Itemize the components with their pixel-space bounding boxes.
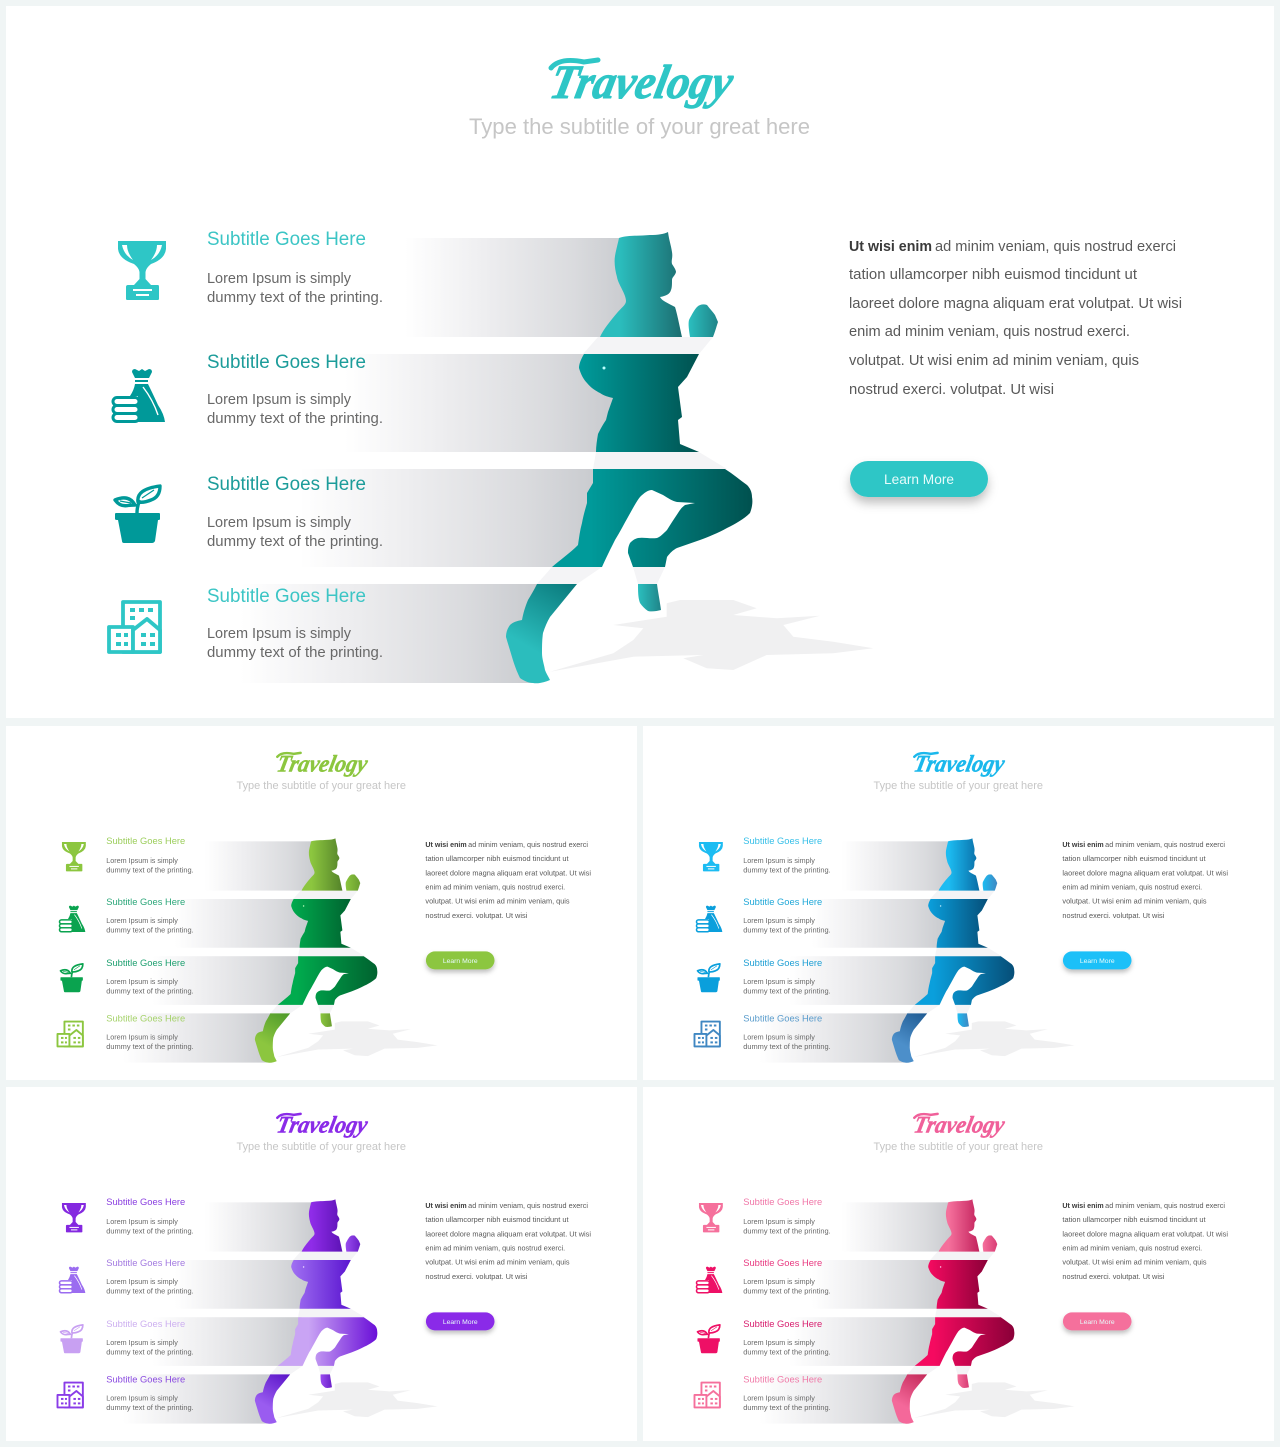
item 4 text: Subtitle Goes Here [207,586,366,607]
ground shadow [550,600,873,672]
body paragraph: enim ad minim veniam, quis nostrud exerci. [425,882,565,891]
item 1 text: Subtitle Goes Here [106,836,185,847]
panel: blue slide [643,726,1274,1080]
ground shadow [277,1021,437,1057]
item 4 text: Subtitle Goes Here [106,1014,185,1025]
title: Travelogy [546,56,738,109]
body paragraph: laoreet dolore magna aliquam erat volutpat. Ut wisi [1062,868,1228,877]
item 1 text: Subtitle Goes Here [743,836,822,847]
item 4 text: Subtitle Goes Here [743,1014,822,1025]
item 2 text: Lorem Ipsum is simply [106,916,178,925]
item 4 text [207,586,383,661]
icon: plant [697,964,720,992]
body paragraph: tation ullamcorper nibh euismod tincidunt ut [1062,1215,1207,1224]
body paragraph: Ut wisi enim [1062,840,1104,849]
item 4 text: Lorem Ipsum is simply [207,626,352,642]
icon: buildings [57,1383,83,1407]
gradient bars [760,1202,1002,1424]
title: Travelogy [274,1112,370,1139]
runner silhouette [892,838,1014,1063]
body paragraph [849,238,1182,398]
body paragraph [425,840,591,920]
panel: pink slide [643,1087,1274,1441]
subtitle: Type the subtitle of your great here [873,780,1043,792]
item 1 text: Subtitle Goes Here [743,1197,822,1208]
item 4 text: dummy text of the printing. [207,645,383,661]
item 1 text [743,836,831,874]
item 1 text: Lorem Ipsum is simply [207,271,352,287]
icon: money bag [696,906,722,932]
item 1 text: dummy text of the printing. [106,865,194,874]
item 1 text: dummy text of the printing. [207,290,383,306]
item 3 text: Subtitle Goes Here [106,958,185,969]
body paragraph: laoreet dolore magna aliquam erat volutpat. Ut wisi [849,295,1182,312]
item 1 text: Subtitle Goes Here [106,1197,185,1208]
item 3 text [743,958,831,996]
item 2 text [743,1258,831,1296]
button: learn more [1063,951,1132,969]
item 1 text: Lorem Ipsum is simply [743,1217,815,1226]
item 2 text [106,897,194,935]
item 3 text: dummy text of the printing. [743,987,831,996]
body paragraph: Ut wisi enim [849,238,932,255]
gradient bars [760,841,1002,1063]
body paragraph: volutpat. Ut wisi enim ad minim veniam, quis [1062,897,1207,906]
body paragraph: volutpat. Ut wisi enim ad minim veniam, quis [425,1258,570,1267]
item 1 text [207,229,383,306]
item 1 text [106,1197,194,1235]
item 3 text: dummy text of the printing. [743,1348,831,1357]
item 4 text [106,1375,194,1412]
item 2 text: Lorem Ipsum is simply [207,392,352,408]
button: learn more [1063,1312,1132,1330]
runner silhouette [255,838,377,1063]
item 4 text: Lorem Ipsum is simply [743,1032,815,1041]
icon: buildings [694,1383,720,1407]
button: learn more [850,461,988,497]
ground shadow [277,1382,437,1418]
item 3 text: Lorem Ipsum is simply [207,515,352,531]
body paragraph: laoreet dolore magna aliquam erat volutpat. Ut wisi [425,868,591,877]
subtitle: Type the subtitle of your great here [236,780,406,792]
body paragraph [1062,1201,1228,1281]
body paragraph: laoreet dolore magna aliquam erat volutpat. Ut wisi [425,1229,591,1238]
item 4 text: dummy text of the printing. [106,1042,194,1051]
body paragraph: tation ullamcorper nibh euismod tincidunt ut [425,1215,570,1224]
item 2 text: dummy text of the printing. [743,1287,831,1296]
icon: plant [60,1325,83,1353]
item 3 text: Subtitle Goes Here [743,958,822,969]
gradient bars [123,1202,365,1424]
item 4 text: Lorem Ipsum is simply [106,1393,178,1402]
item 4 text [106,1014,194,1051]
ground shadow [914,1021,1074,1057]
item 1 text: dummy text of the printing. [106,1226,194,1235]
subtitle: Type the subtitle of your great here [236,1141,406,1153]
icon: trophy [699,842,723,871]
item 2 text: Subtitle Goes Here [106,1258,185,1269]
subtitle: Type the subtitle of your great here [873,1141,1043,1153]
body paragraph: ad minim veniam, quis nostrud exerci [935,238,1176,255]
body paragraph: tation ullamcorper nibh euismod tincidunt ut [849,266,1138,283]
item 4 text: dummy text of the printing. [106,1403,194,1412]
item 3 text: Lorem Ipsum is simply [106,977,178,986]
icon: plant [60,964,83,992]
button: learn more: Learn More [443,1319,478,1326]
icon: money bag [59,906,85,932]
panel: green slide [6,726,637,1080]
icon: trophy [699,1203,723,1232]
body paragraph: enim ad minim veniam, quis nostrud exerci. [1062,1243,1202,1252]
body paragraph: Ut wisi enim [1062,1201,1104,1210]
item 2 text: Subtitle Goes Here [743,897,822,908]
gradient bars [123,841,365,1063]
body paragraph: ad minim veniam, quis nostrud exerci [468,840,588,849]
body paragraph: enim ad minim veniam, quis nostrud exerci. [425,1243,565,1252]
icon: plant [115,486,160,543]
item 2 text: dummy text of the printing. [743,926,831,935]
icon: money bag [696,1267,722,1293]
body paragraph: volutpat. Ut wisi enim ad minim veniam, quis [849,352,1139,369]
body paragraph: volutpat. Ut wisi enim ad minim veniam, quis [425,897,570,906]
body paragraph [1062,840,1228,920]
icon: buildings [109,602,160,652]
icon: buildings [694,1022,720,1046]
body paragraph: enim ad minim veniam, quis nostrud exerci. [849,323,1130,340]
item 1 text [743,1197,831,1235]
icon: money bag [113,369,165,422]
item 4 text [743,1014,831,1051]
body paragraph: nostrud exerci. volutpat. Ut wisi [425,911,528,920]
item 2 text: Lorem Ipsum is simply [743,916,815,925]
title: Travelogy [274,751,370,778]
item 3 text: dummy text of the printing. [207,534,383,550]
item 4 text: Subtitle Goes Here [743,1375,822,1386]
icon: plant [697,1325,720,1353]
item 2 text: Subtitle Goes Here [743,1258,822,1269]
item 3 text [207,474,383,550]
body paragraph: enim ad minim veniam, quis nostrud exerci. [1062,882,1202,891]
icon: trophy [62,1203,86,1232]
item 3 text: dummy text of the printing. [106,987,194,996]
body paragraph: nostrud exerci. volutpat. Ut wisi [425,1272,528,1281]
button: learn more: Learn More [884,472,954,487]
item 1 text: dummy text of the printing. [743,865,831,874]
item 4 text: Lorem Ipsum is simply [743,1393,815,1402]
item 4 text [743,1375,831,1412]
body paragraph: nostrud exerci. volutpat. Ut wisi [849,381,1054,398]
body paragraph: tation ullamcorper nibh euismod tincidunt ut [425,854,570,863]
item 3 text: Lorem Ipsum is simply [743,977,815,986]
item 3 text [743,1319,831,1357]
gradient bars [240,238,727,683]
ground shadow [914,1382,1074,1418]
item 3 text: Lorem Ipsum is simply [106,1338,178,1347]
button: learn more [426,1312,495,1330]
body paragraph [425,1201,591,1281]
runner silhouette [255,1199,377,1424]
runner silhouette [506,232,752,683]
body paragraph: laoreet dolore magna aliquam erat volutpat. Ut wisi [1062,1229,1228,1238]
item 2 text: dummy text of the printing. [106,926,194,935]
item 2 text: dummy text of the printing. [207,411,383,427]
item 2 text: dummy text of the printing. [106,1287,194,1296]
title: Travelogy [911,751,1007,778]
body paragraph: nostrud exerci. volutpat. Ut wisi [1062,911,1165,920]
item 3 text [106,958,194,996]
body paragraph: ad minim veniam, quis nostrud exerci [1105,840,1225,849]
item 2 text: Lorem Ipsum is simply [743,1277,815,1286]
icon: buildings [57,1022,83,1046]
body paragraph: Ut wisi enim [425,1201,467,1210]
body paragraph: ad minim veniam, quis nostrud exerci [468,1201,588,1210]
panel: teal slide [6,6,1274,718]
body paragraph: volutpat. Ut wisi enim ad minim veniam, quis [1062,1258,1207,1267]
button: learn more: Learn More [1080,1319,1115,1326]
item 4 text: dummy text of the printing. [743,1403,831,1412]
item 2 text [207,352,383,427]
subtitle: Type the subtitle of your great here [469,114,810,139]
item 2 text [106,1258,194,1296]
item 4 text: Lorem Ipsum is simply [106,1032,178,1041]
item 1 text: Subtitle Goes Here [207,229,366,250]
item 4 text: dummy text of the printing. [743,1042,831,1051]
item 1 text [106,836,194,874]
item 3 text: Subtitle Goes Here [106,1319,185,1330]
item 2 text [743,897,831,935]
item 2 text: Subtitle Goes Here [106,897,185,908]
item 1 text: dummy text of the printing. [743,1226,831,1235]
body paragraph: tation ullamcorper nibh euismod tincidunt ut [1062,854,1207,863]
item 3 text: Subtitle Goes Here [207,474,366,495]
item 3 text: Lorem Ipsum is simply [743,1338,815,1347]
panel: purple slide [6,1087,637,1441]
item 3 text: Subtitle Goes Here [743,1319,822,1330]
item 2 text: Subtitle Goes Here [207,352,366,373]
item 3 text [106,1319,194,1357]
body paragraph: Ut wisi enim [425,840,467,849]
item 1 text: Lorem Ipsum is simply [106,1217,178,1226]
body paragraph: nostrud exerci. volutpat. Ut wisi [1062,1272,1165,1281]
icon: money bag [59,1267,85,1293]
item 4 text: Subtitle Goes Here [106,1375,185,1386]
title: Travelogy [911,1112,1007,1139]
button: learn more: Learn More [1080,958,1115,965]
item 1 text: Lorem Ipsum is simply [743,856,815,865]
icon: trophy [62,842,86,871]
item 3 text: dummy text of the printing. [106,1348,194,1357]
button: learn more [426,951,495,969]
runner silhouette [892,1199,1014,1424]
body paragraph: ad minim veniam, quis nostrud exerci [1105,1201,1225,1210]
item 1 text: Lorem Ipsum is simply [106,856,178,865]
button: learn more: Learn More [443,958,478,965]
item 2 text: Lorem Ipsum is simply [106,1277,178,1286]
icon: trophy [118,241,166,300]
